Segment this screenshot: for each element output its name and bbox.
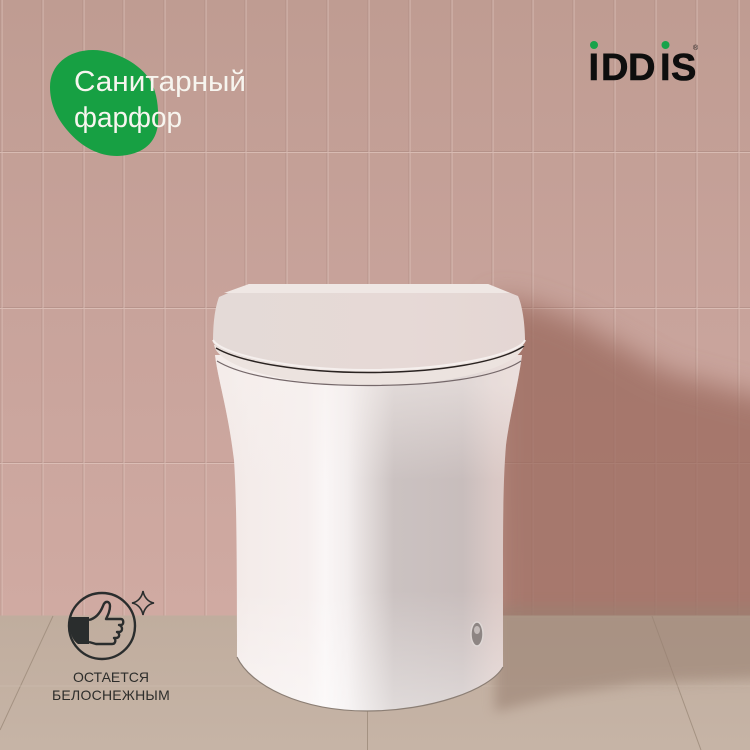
logo: IDDIS: IDDIS	[588, 47, 696, 89]
badge: green blob	[50, 50, 158, 156]
lid	[213, 284, 525, 371]
toilet body	[215, 355, 522, 711]
floor shadow	[495, 606, 750, 712]
wall shadow	[502, 288, 750, 616]
heading: фарфор	[74, 102, 182, 134]
heading: Санитарный	[74, 66, 246, 98]
caption: БЕЛОСНЕЖНЫМ	[52, 687, 170, 703]
caption: ОСТАЕТСЯ	[73, 669, 149, 685]
icon: sparkle	[132, 591, 154, 615]
floor	[0, 606, 750, 750]
seat rim	[214, 345, 524, 386]
drain button	[471, 622, 483, 646]
logo: IDDIS: ®	[693, 44, 699, 52]
toilet	[213, 284, 525, 711]
icon: thumbs up	[69, 591, 154, 659]
